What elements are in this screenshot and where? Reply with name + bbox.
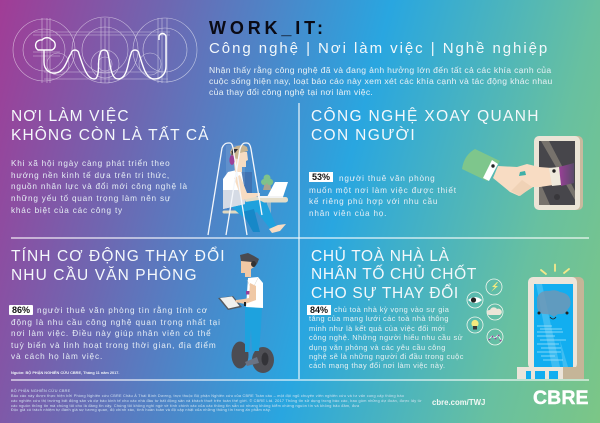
legs [229,200,277,230]
website link: cbre.com/TWJ [432,398,485,407]
hands [493,164,553,196]
logo: CBRE: CBRE [533,387,589,409]
illustration: man on segway [218,253,274,373]
icon: network chart [487,329,503,345]
intro paragraph [209,65,553,97]
text: technology [309,174,457,218]
text: landlords: tăng của mạng lưới các toà nhà thông [309,314,449,323]
panel: mobility [9,246,226,361]
heading: mobility: NHU CẦU VĂN PHÒNG [11,266,198,284]
illustration: person on swing with laptop [208,143,288,235]
text: technology: người thuê văn phòng [339,174,436,183]
head [233,152,248,172]
heading: landlords: NHÂN TỐ CHỦ CHỐT [311,266,477,283]
heading: workplace [11,107,210,144]
panel: workplace [11,107,210,215]
text: technology: kế riêng phù hợp với nhu cầu [309,197,438,206]
intro paragraph: Nhận thấy rằng công nghệ đã và đang ảnh hưởng lớn đến tất cả các khía cạnh của [209,65,552,75]
panel: technology around people [309,107,540,218]
panel: landlords [307,246,477,370]
purple sleeve [559,163,574,186]
text: workplace: hướng nền kinh tế dựa trên tri thức, [11,171,170,180]
text: mobility: động là nhu cầu công nghệ quan trọng nhất tại [11,318,221,326]
heading: mobility: TÍNH CƠ ĐỘNG THAY ĐỔI [11,248,226,265]
text: landlords: dụng văn phòng và các yêu cầu công [309,343,446,352]
title: WORK_IT: WORK_IT: [209,18,327,38]
icon: cloud [487,304,503,320]
heading: landlords: CHO SỰ THAY ĐỔI [311,285,459,302]
text: mobility: và cách họ làm việc. [11,352,103,361]
cuff [483,160,498,181]
stat: 53%: 53% [312,172,330,182]
illustration: smart building [517,264,584,379]
torso [223,169,245,209]
text: landlords [309,305,464,370]
text: landlords: cách mạng thay đổi nơi làm việc này. [309,361,446,370]
subtitle: Công nghệ | Nơi làm việc | Nghề nghiệp [209,40,549,57]
heading: technology [311,107,540,144]
tablet [218,296,242,310]
sleeve [462,149,500,181]
arm [234,175,260,200]
heading: landlords: CHỦ TOÀ NHÀ LÀ [311,248,450,265]
text: mobility: tuỳ biến và linh hoạt trong thời gian, địa điểm [11,340,217,350]
footer disclaimer: các nghiên cứu thị trường bất động sản và dự báo kinh tế cho các nhà đầu tư bất động sản và khách thuê trên toàn thế giới. © CBRE Ltd. 2017 Thông tin sử dụng trong báo cáo, bao gồm những dự đoán, được lấy từ [11,399,422,403]
intro paragraph: cuộc sống hiện nay, loạt báo cáo này xem xét các khía cạnh và tác động khác nhau [209,76,553,86]
text: workplace: khác biệt của các công ty [11,206,123,215]
head [241,259,254,277]
trousers [245,307,262,352]
icon: light bulb [467,317,483,333]
heading: workplace: KHÔNG CÒN LÀ TẤT CẢ [11,126,210,144]
heading: mobility [11,246,226,284]
heading: technology: CON NGƯỜI [311,126,416,144]
text: landlords: công nghệ. Những người hiểu nhu cầu sử [309,333,463,342]
text: workplace [11,159,188,215]
swing frame [208,143,262,235]
footer disclaimer: Báo cáo này được thực hiện bởi Phòng Nghiên cứu CBRE Châu Á Thái Bình Dương, trực thuộc Bộ phận Nghiên cứu của CBRE Toàn cầu – một đội ngũ chuyên viên nghiên cứu và tư vấn cung cấp thông báo [11,394,404,398]
laptop [267,182,288,197]
footer disclaimer: BỘ PHẬN NGHIÊN CỨU CBRE [11,389,70,393]
icon: eye [467,292,483,308]
seat [224,210,246,214]
text: mobility: nơi làm việc. Điều này giúp nhân viên có thể [11,329,212,338]
source note: Nguồn: BỘ PHẬN NGHIÊN CỨU CBRE, Tháng 11 năm 2017. [11,371,119,375]
stat: 86%: 86% [12,305,30,315]
illustration: handshake through phone [462,136,583,210]
text: technology: nhân viên của họ. [309,209,387,218]
table [267,198,271,220]
intro paragraph: của thay đổi công nghệ tại nơi làm việc. [209,87,373,97]
footer disclaimer [11,388,422,412]
shirt [246,277,263,308]
icon: lightning [486,279,502,295]
text: technology: muốn một nơi làm việc được thiết [309,186,457,195]
text: landlords: nghệ sẽ là những người đi đầu trong cuộc [309,352,464,361]
arm [235,283,256,304]
text: landlords: chủ toà nhà kỳ vọng vào sự gia [334,305,449,314]
title block [209,18,553,97]
heading: workplace: NƠI LÀM VIỆC [11,108,130,125]
heading: technology: CÔNG NGHỆ XOAY QUANH [311,108,540,125]
icon: geometric logo [13,17,197,83]
text: mobility: người thuê văn phòng tin rằng tính cơ [37,306,208,315]
text: mobility [11,306,221,361]
text: workplace: những yếu tố quan trọng làm nên sự [11,194,171,203]
plant [263,178,271,190]
text: workplace: nguồn nhân lực và đổi mới công nghệ là [11,182,188,191]
footer disclaimer: các nguồn thông tin mà chúng tôi cho là đáng tin cậy. Chúng tôi không nghi ngờ về tính chính xác của các thông tin sẵn có nhưng không kiểm chứng nguồn tin và không bảo đảm, đưa [11,404,359,408]
footer disclaimer: Độc giả có trách nhiệm tự đánh giá sự tương quan, độ chính xác, tính hoàn toàn và độ cập nhật của những thông tin trong ấn phẩm này. [11,408,271,412]
heading: landlords [311,246,477,302]
text: workplace: Khi xã hội ngày càng phát triển theo [11,159,170,168]
stat: 84%: 84% [310,305,328,315]
text: landlords: minh như là kết quả của việc đổi mới [309,324,445,333]
